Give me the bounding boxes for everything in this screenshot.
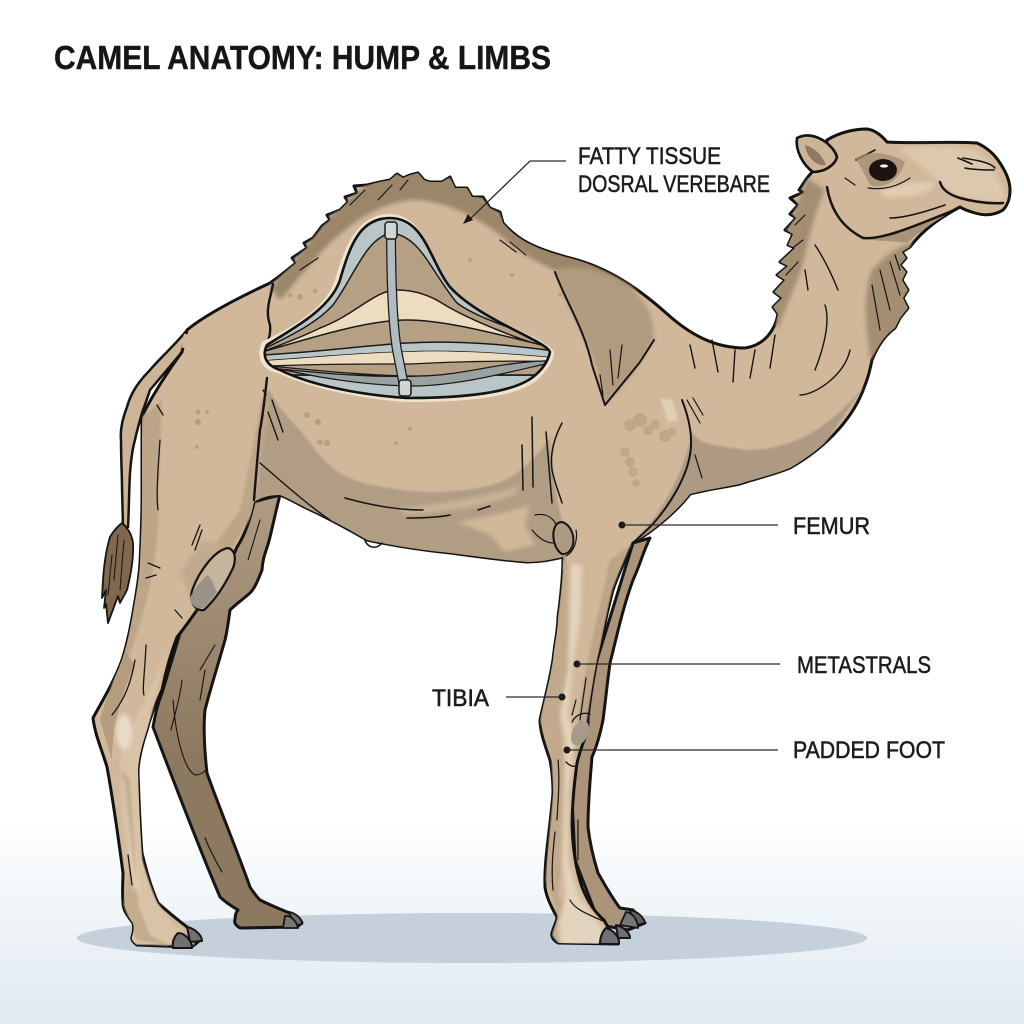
shoulder speckles: [620, 413, 676, 487]
hind leg lines: [112, 405, 202, 885]
lower front joint: [566, 713, 593, 766]
label: padded foot: PADDED FOOT: [793, 737, 945, 764]
knee shadow: [180, 541, 218, 612]
label: fatty tissue and dorsal vertebrae: DOSRAL VEREBARE: [578, 171, 770, 198]
title: CAMEL ANATOMY: HUMP & LIMBS: [54, 39, 551, 76]
label: femur: FEMUR: [793, 513, 870, 540]
camel illustration: [93, 129, 1010, 948]
label dots: [558, 522, 626, 754]
hump fur: [270, 170, 640, 300]
label: metastrals: METASTRALS: [797, 652, 931, 679]
belly and chest lines: [345, 417, 562, 547]
chest shadow: [630, 385, 865, 548]
leg tendon lines: [552, 678, 605, 922]
spine column: [385, 222, 411, 396]
chest and shoulder lines: [633, 400, 691, 543]
belly shadow: [250, 388, 566, 570]
hind leg rear shade: [106, 401, 162, 694]
neck lines: [690, 245, 850, 395]
label: tibia: TIBIA: [432, 685, 489, 712]
far hind leg: [153, 495, 302, 928]
ground shadow: [77, 913, 867, 963]
hind knee: [190, 548, 235, 610]
near front leg shading: [540, 560, 600, 945]
ear: [797, 135, 837, 172]
near front hoof: [600, 925, 630, 944]
far front hoofs: [630, 910, 645, 926]
far hind hoofs: [289, 912, 302, 926]
chest highlight: [660, 398, 678, 422]
label: fatty tissue and dorsal vertebrae: [463, 143, 770, 224]
shading clipped to body: [100, 385, 865, 946]
label: tibia: [432, 685, 562, 712]
neck mane: [770, 178, 915, 360]
shoulder fur patch: [555, 268, 654, 405]
fur speckles: [195, 258, 562, 449]
camel body and near legs: [93, 129, 1010, 947]
near hind leg lower shade: [100, 650, 135, 760]
head details: [827, 146, 1005, 243]
front knee: [532, 514, 577, 556]
near hind hoof: [173, 927, 202, 948]
tail: [102, 330, 187, 623]
far front leg: [570, 538, 650, 930]
belly light patch: [400, 485, 520, 515]
rear body edge line: [254, 284, 273, 500]
label: fatty tissue and dorsal vertebrae: FATTY TISSUE: [578, 143, 721, 170]
hump cross-section: [255, 210, 560, 405]
